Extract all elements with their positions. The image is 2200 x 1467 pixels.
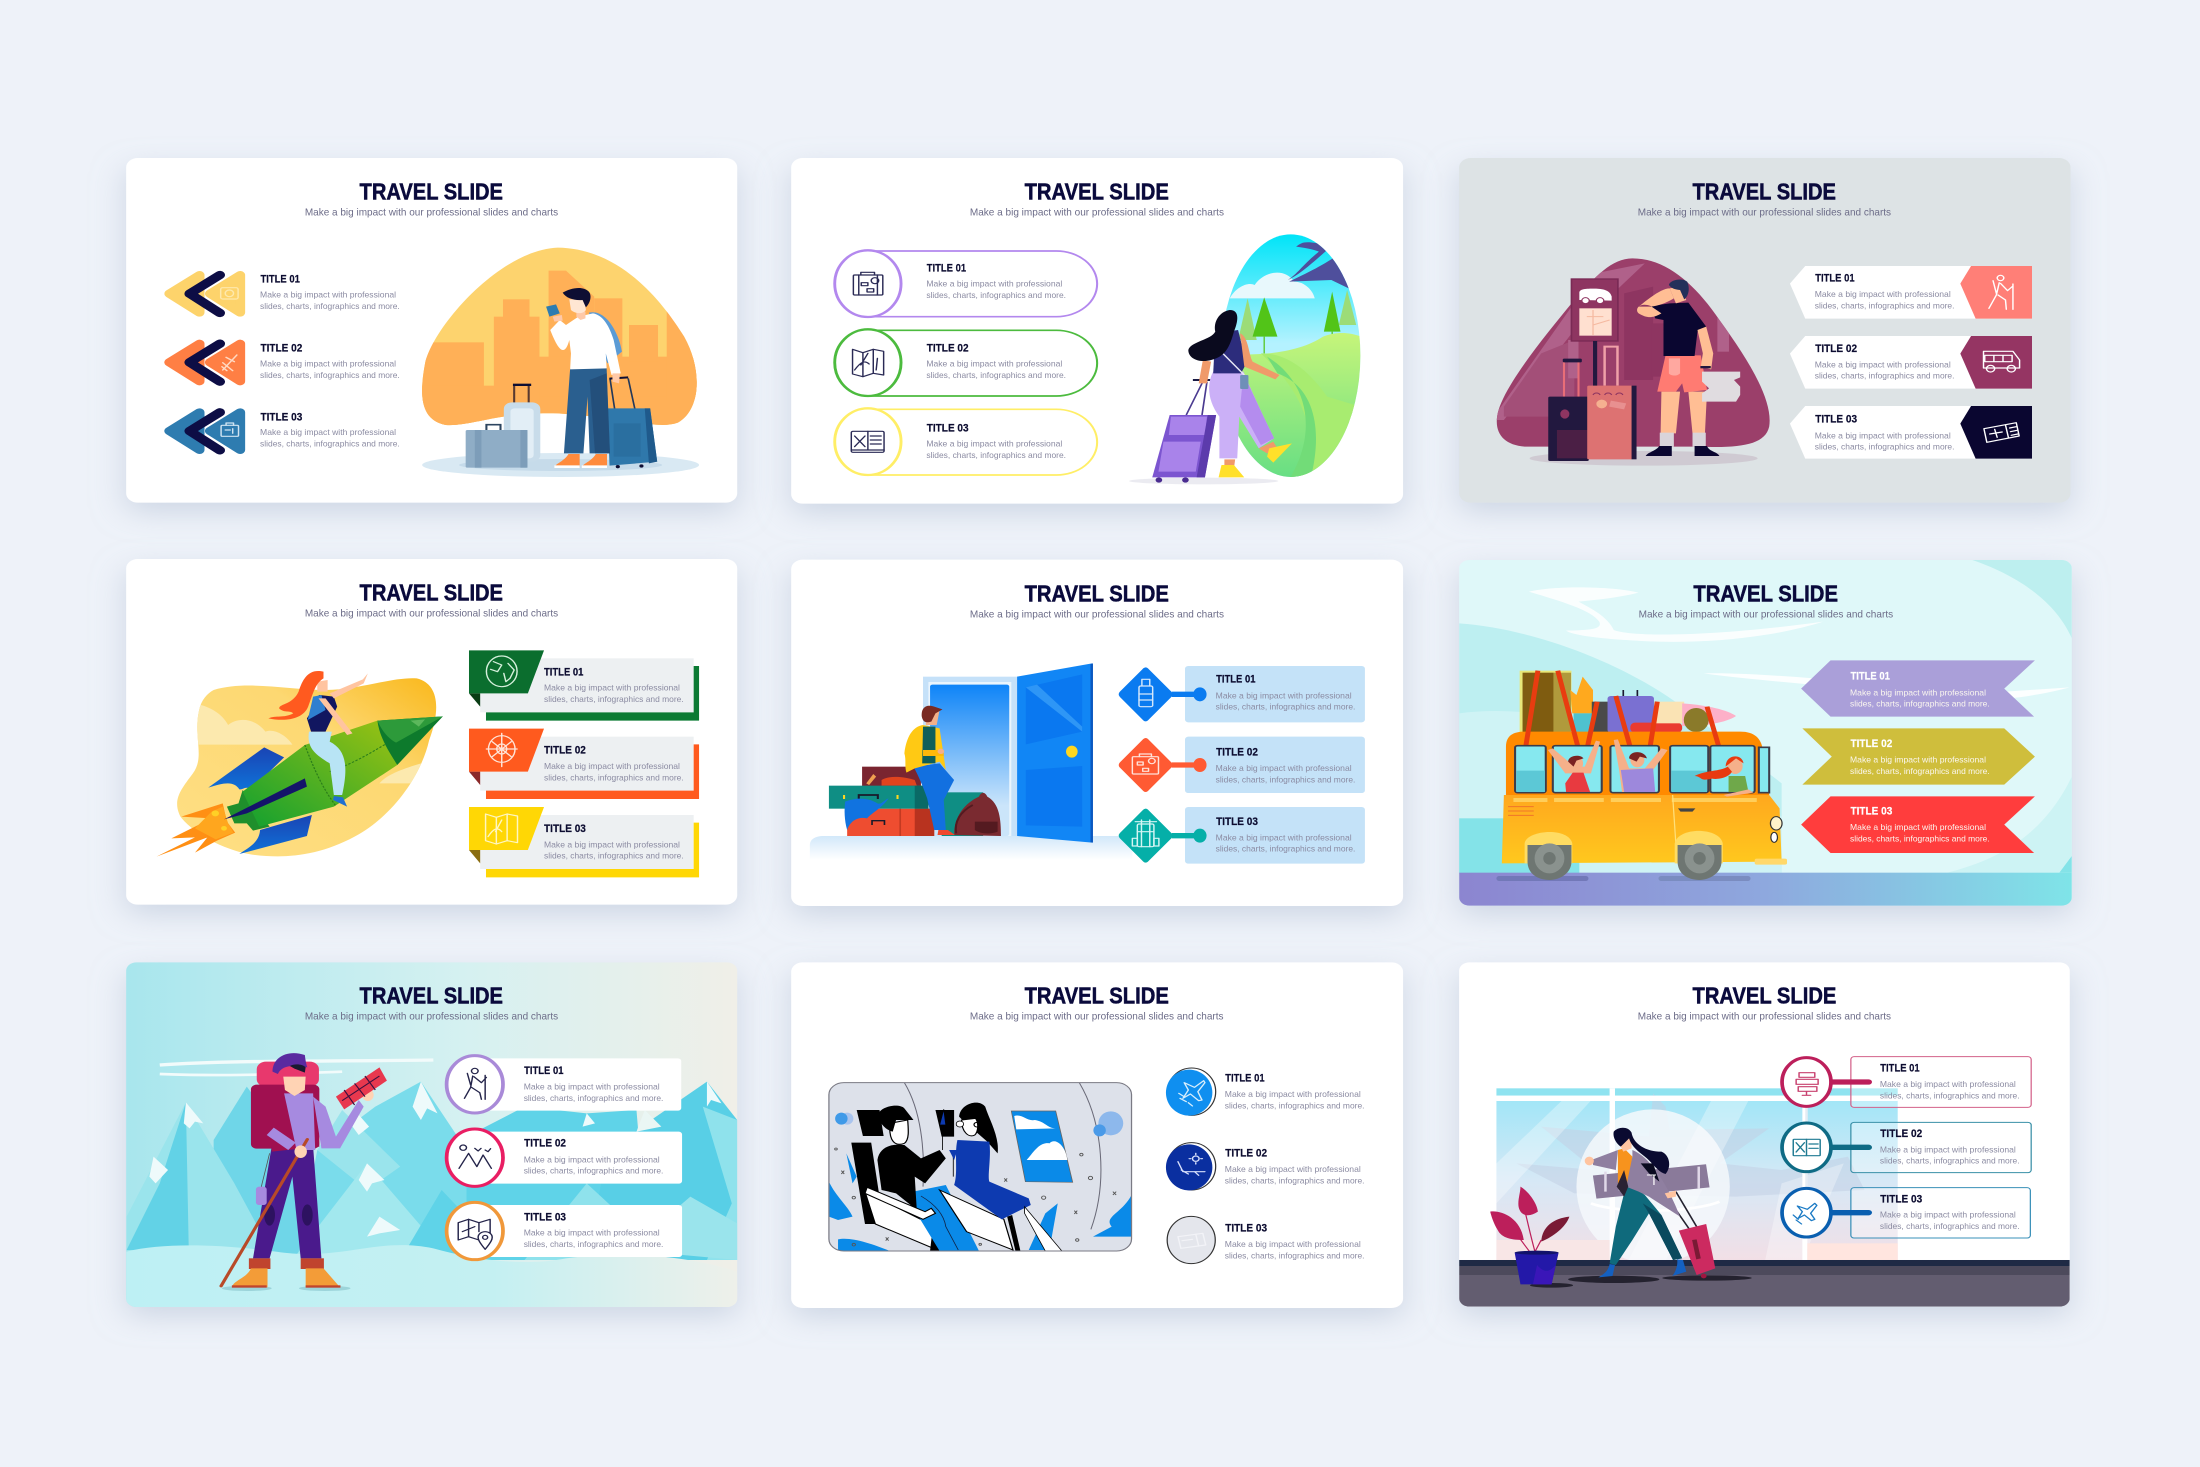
pill 03 with ticket icon: slides, charts, infographics and more. [926,451,1066,460]
flag 03 with map icon: TITLE 03 [544,822,586,835]
tag 02 with bus icon [1790,336,2032,389]
slide heading: TRAVEL SLIDE [1025,178,1169,205]
flag 03 with map icon [469,807,699,877]
pill 02 with map icon: Make a big impact with professional [926,360,1062,368]
item 02 text: slides, charts, infographics and more. [260,371,400,380]
ribbon 02 [1802,728,2035,785]
item 03 text [260,411,400,448]
item 03 with map pin circle [447,1202,682,1260]
card background [1459,158,2071,503]
item 01 with luggage diamond [1119,666,1365,722]
card background [791,158,1403,504]
item 02 with sunbed badge [1166,1143,1365,1190]
item 02 with mountains circle: slides, charts, infographics and more. [524,1167,663,1175]
card background [1459,560,2072,906]
flag 03 with map icon: slides, charts, infographics and more. [544,852,684,860]
slide subheading: Make a big impact with our professional slides and charts [305,608,559,619]
tag 01 with hiker icon: slides, charts, infographics and more. [1815,301,1954,310]
item 01 with plane badge [1166,1068,1365,1116]
slide subheading: Make a big impact with our professional slides and charts [305,207,559,218]
item 02 text: Make a big impact with professional [260,359,396,368]
item 03 text: Make a big impact with professional [260,428,396,437]
item 03 with ticket badge: Make a big impact with professional [1225,1240,1361,1249]
item 01 with plane badge: Make a big impact with professional [1225,1090,1361,1099]
item 03 with map pin circle: slides, charts, infographics and more. [524,1240,663,1249]
pill 03 with ticket icon: TITLE 03 [927,422,969,434]
slide heading: TRAVEL SLIDE [1025,982,1169,1009]
flag 02 with ship wheel icon [469,729,699,799]
item 02 text [260,342,400,380]
panel: slide 2 pill list and hiker woman [791,158,1403,504]
tag 02 with bus icon: Make a big impact with professional [1815,360,1951,369]
pill 01 with suitcase icon: TITLE 01 [927,262,966,274]
item 02 with suitcase diamond: slides, charts, infographics and more. [1216,775,1355,784]
item 02 with ticket circle: Make a big impact with professional [1880,1145,2016,1154]
panel: slide 6 bus and ribbons [1459,560,2072,906]
tag 02 with bus icon: TITLE 02 [1815,342,1857,355]
pill 01 with suitcase icon: Make a big impact with professional [926,280,1062,288]
slide heading: TRAVEL SLIDE [360,178,503,205]
item 03 with backpack diamond: TITLE 03 [1216,815,1258,828]
tag 02 with bus icon: slides, charts, infographics and more. [1815,372,1954,380]
flag 01 with globe icon [469,650,699,721]
item 01 text: TITLE 01 [260,273,300,285]
infographic canvas [116,158,2082,1326]
card background [126,559,737,905]
item 03 with plane circle: slides, charts, infographics and more. [1880,1222,2020,1231]
ribbon 02: Make a big impact with professional [1850,756,1986,764]
item 02 with ticket circle: TITLE 02 [1880,1127,1922,1140]
item 03 with ticket badge: TITLE 03 [1225,1222,1267,1234]
tag 03 with ticket icon [1790,406,2032,459]
item 02 with ticket circle [1782,1122,2031,1187]
illustration: man with map and luggage [1491,258,1770,466]
panel: slide 4 flags and rocket rider [126,559,737,905]
tag 03 with ticket icon: slides, charts, infographics and more. [1815,443,1954,451]
slide heading: TRAVEL SLIDE [1025,580,1169,607]
mountain landscape background [126,1060,737,1307]
flag 01 with globe icon: slides, charts, infographics and more. [544,695,684,704]
item 01 with signpost circle: slides, charts, infographics and more. [1880,1091,2020,1100]
illustration: woman riding rocket [156,671,443,857]
illustration: traveller with luggage and skyline [417,248,707,477]
slide heading: TRAVEL SLIDE [1693,982,1836,1009]
panel: slide 9 airport terminal [1459,962,2070,1307]
ribbon 03: TITLE 03 [1850,805,1892,817]
card background [126,158,737,503]
arrow icon 02: plane [169,344,240,382]
item 01 with luggage diamond: slides, charts, infographics and more. [1216,703,1355,711]
illustration: woman walking with suitcase and plant [1490,1128,1715,1284]
item 02 text: TITLE 02 [260,342,302,354]
item 01 text [260,273,400,311]
item 01 text: Make a big impact with professional [260,291,396,299]
tag 01 with hiker icon: Make a big impact with professional [1815,290,1951,299]
slide heading: TRAVEL SLIDE [1693,580,1838,607]
item 03 with backpack diamond [1119,807,1365,864]
arrow icon 03: map case [169,412,240,450]
flag 02 with ship wheel icon: slides, charts, infographics and more. [544,773,684,782]
tag 03 with ticket icon: Make a big impact with professional [1815,431,1951,440]
ribbon 03 [1801,796,2035,853]
item 01 with signpost circle [1782,1057,2031,1122]
flag 03 with map icon: Make a big impact with professional [544,840,680,849]
slide subheading: Make a big impact with our professional slides and charts [305,1011,559,1022]
tag 01 with hiker icon: TITLE 01 [1815,272,1855,284]
ribbon 01 [1801,660,2035,717]
flag 02 with ship wheel icon: Make a big impact with professional [544,762,680,771]
illustration: man on suitcases by open door [810,663,1132,860]
illustration: couple in airplane seats [829,1083,1132,1251]
item 01 with luggage diamond: Make a big impact with professional [1216,691,1352,700]
pill 02 with map icon [835,329,1097,396]
slide heading: TRAVEL SLIDE [1693,178,1836,205]
item 01 with signpost circle: Make a big impact with professional [1880,1080,2016,1089]
flag 02 with ship wheel icon: TITLE 02 [544,744,586,756]
item 03 text: slides, charts, infographics and more. [260,440,400,448]
pill 03 with ticket icon: Make a big impact with professional [926,440,1062,448]
tag 03 with ticket icon: TITLE 03 [1815,413,1857,425]
panel: slide 3 arrow tags and map reader [1459,158,2071,503]
item 03 text: TITLE 03 [260,411,302,423]
item 02 with suitcase diamond: TITLE 02 [1216,746,1258,758]
item 01 with hiker circle: TITLE 01 [524,1064,564,1077]
item 02 with suitcase diamond [1119,737,1365,793]
flag 01 with globe icon: TITLE 01 [544,666,583,678]
item 01 with plane badge: TITLE 01 [1225,1072,1265,1084]
slide subheading: Make a big impact with our professional slides and charts [1638,1011,1892,1022]
illustration: hiker with map and walking pole [221,1053,387,1291]
pill 02 with map icon: slides, charts, infographics and more. [926,371,1066,380]
ribbon 03: Make a big impact with professional [1850,823,1986,832]
item 03 with ticket badge [1167,1216,1365,1264]
pill 01 with suitcase icon [835,250,1097,317]
panel: slide 7 mountain hiker [126,962,737,1307]
item 03 with plane circle [1782,1188,2030,1238]
item 02 with sunbed badge: Make a big impact with professional [1225,1165,1361,1174]
slide subheading: Make a big impact with our professional slides and charts [970,1011,1224,1022]
ribbon 01: Make a big impact with professional [1850,688,1986,697]
illustration: woman walking with suitcase into landscape oval [1129,234,1369,484]
ribbon 02: slides, charts, infographics and more. [1850,767,1990,776]
item 01 text: slides, charts, infographics and more. [260,302,400,311]
item 03 with backpack diamond: Make a big impact with professional [1216,833,1352,842]
card background [126,962,737,1307]
slide subheading: Make a big impact with our professional slides and charts [970,609,1224,620]
item 01 with luggage diamond: TITLE 01 [1216,673,1256,685]
card background [1459,962,2070,1307]
pill 02 with map icon: TITLE 02 [927,342,969,354]
item 01 with hiker circle: Make a big impact with professional [524,1083,660,1091]
slide heading: TRAVEL SLIDE [360,579,503,606]
item 03 with plane circle: Make a big impact with professional [1880,1211,2016,1219]
item 02 with mountains circle [447,1129,682,1186]
sky, clouds and road background [1459,560,2072,906]
item 01 with hiker circle: slides, charts, infographics and more. [524,1094,663,1103]
item 03 with map pin circle: TITLE 03 [524,1211,566,1223]
item 02 with ticket circle: slides, charts, infographics and more. [1880,1157,2020,1165]
ribbon 03: slides, charts, infographics and more. [1850,834,1990,843]
slide subheading: Make a big impact with our professional slides and charts [1639,609,1894,620]
item 02 with sunbed badge: TITLE 02 [1225,1147,1267,1159]
slide subheading: Make a big impact with our professional slides and charts [970,208,1224,218]
item 03 with plane circle: TITLE 03 [1880,1193,1922,1205]
card background [791,560,1403,906]
item 01 with hiker circle [447,1056,681,1113]
ribbon 01: slides, charts, infographics and more. [1850,700,1990,708]
panel: slide 8 airplane cabin [791,962,1403,1308]
pill 01 with suitcase icon: slides, charts, infographics and more. [926,291,1066,300]
item 03 with map pin circle: Make a big impact with professional [524,1229,660,1237]
ribbon 02: TITLE 02 [1850,737,1892,750]
flag 01 with globe icon: Make a big impact with professional [544,684,680,692]
item 02 with sunbed badge: slides, charts, infographics and more. [1225,1176,1365,1185]
slide subheading: Make a big impact with our professional slides and charts [1638,207,1892,218]
card background [791,962,1403,1308]
item 02 with mountains circle: TITLE 02 [524,1137,566,1149]
panel: slide 5 door scene and diamonds [791,560,1403,906]
tag 01 with hiker icon [1790,266,2032,319]
panel: slide 1 arrows and traveller [126,158,737,503]
item 02 with suitcase diamond: Make a big impact with professional [1216,764,1352,773]
item 03 with ticket badge: slides, charts, infographics and more. [1225,1251,1365,1260]
terminal window with plane and floor [1459,1088,2070,1307]
illustration: yellow bus with passengers and roof luggage [1502,671,1787,880]
item 01 with signpost circle: TITLE 01 [1880,1062,1920,1074]
ribbon 01: TITLE 01 [1850,670,1890,682]
item 03 with backpack diamond: slides, charts, infographics and more. [1216,845,1355,853]
arrow icon 01: camera [169,275,240,313]
slide heading: TRAVEL SLIDE [360,982,503,1009]
item 01 with plane badge: slides, charts, infographics and more. [1225,1102,1365,1110]
pill 03 with ticket icon [835,408,1097,475]
item 02 with mountains circle: Make a big impact with professional [524,1155,660,1164]
